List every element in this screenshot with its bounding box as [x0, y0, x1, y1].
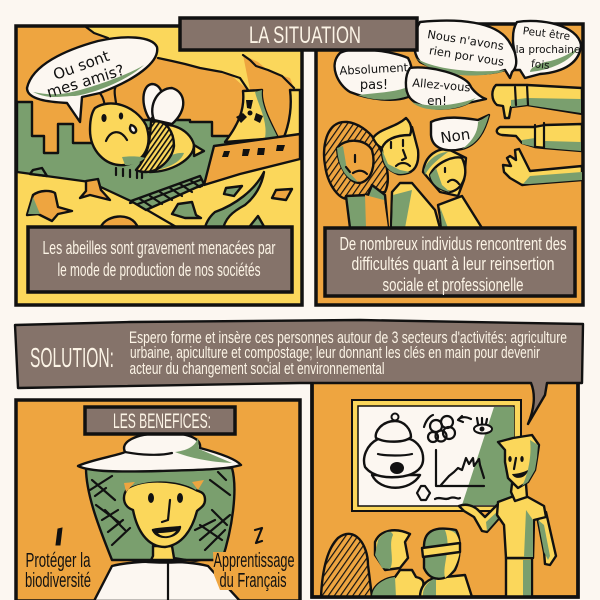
heading: les benefices: LES BENEFICES: — [113, 410, 211, 433]
icon: small bee — [474, 418, 492, 434]
speech bubble: absolument pas: Absolument — [339, 60, 409, 78]
speech bubble: non — [431, 115, 489, 150]
arrow: bee to flower — [458, 416, 471, 422]
title banner — [180, 18, 417, 50]
speech bubble: peut etre — [513, 21, 581, 78]
icon: beehive — [364, 414, 423, 488]
speech bubble: nous n'avons: rien por vous — [428, 43, 505, 69]
icon: hexagon — [417, 486, 430, 500]
panel: people rejected — [316, 21, 583, 305]
speech bubble: ou sont mes amis — [27, 37, 157, 122]
icon: flower — [424, 415, 455, 442]
bee — [90, 83, 204, 178]
speech bubble: allez-vous en: Allez-vous — [412, 75, 471, 95]
benefit 1: Protéger la — [26, 550, 91, 572]
left arm — [459, 505, 502, 532]
right arm — [537, 512, 556, 565]
solution banner — [15, 320, 583, 424]
benefit 1: biodiversité — [25, 570, 91, 592]
sky smoke — [17, 27, 250, 170]
neck and head — [511, 484, 527, 501]
whiteboard — [352, 400, 521, 511]
panel: benefits — [16, 400, 300, 600]
speech bubble: nous n'avons: Nous n'avons — [426, 27, 505, 53]
speech bubble: ou sont mes amis: mes amis? — [45, 61, 127, 102]
panel: presentation — [312, 380, 578, 597]
speech bubble: peut etre: fois — [530, 58, 550, 72]
line chart — [436, 450, 484, 486]
veil net — [86, 468, 234, 560]
speech bubble: nous n'avons — [414, 21, 517, 78]
benefit 2: du Français — [220, 570, 286, 592]
nuclear plant — [204, 90, 300, 185]
solution banner: acteur du changement social et environnemental — [130, 359, 384, 378]
benefit 2: Apprentissage — [214, 550, 294, 572]
title banner: LA SITUATION — [249, 22, 361, 49]
coat — [94, 562, 240, 600]
heading: les benefices — [85, 407, 235, 434]
presenter — [459, 435, 556, 597]
shirt — [497, 496, 546, 558]
caption: le mode de production de nos sociétés — [58, 259, 260, 280]
speech bubble: non: Non — [439, 125, 471, 147]
person: woman with headband — [423, 149, 482, 228]
person: man — [373, 118, 440, 228]
pants — [506, 558, 532, 597]
panel: bees threatened — [16, 26, 302, 305]
beekeeper — [78, 433, 241, 600]
hills — [17, 150, 300, 304]
benefit 2 — [213, 528, 296, 592]
hat — [78, 433, 241, 471]
audience — [321, 529, 472, 597]
speech bubble: absolument pas — [335, 49, 412, 100]
speech bubble: allez-vous en: en! — [427, 94, 447, 108]
caption — [28, 227, 292, 292]
speech bubble: absolument pas: pas! — [360, 78, 388, 93]
tree stumps — [27, 168, 292, 232]
speech bubble: ou sont mes amis: Ou sont — [51, 47, 112, 84]
river — [204, 172, 264, 232]
caption — [325, 228, 575, 296]
person: woman with curly hair — [324, 122, 388, 228]
benefit 1 — [25, 528, 91, 592]
caption: sociale et professionelle — [382, 275, 524, 295]
head — [151, 546, 186, 560]
hand: thumbs down — [492, 85, 582, 118]
city silhouette — [17, 102, 232, 215]
speech bubble: allez-vous en — [406, 67, 486, 110]
hand: stop — [503, 149, 582, 185]
speech bubble: peut etre: Peut être — [522, 25, 571, 43]
hand: pointing — [497, 123, 582, 151]
solution banner: SOLUTION: — [30, 342, 114, 373]
caption: Les abeilles sont gravement menacées par — [42, 237, 276, 258]
speech bubble: peut etre: la prochaine — [516, 44, 580, 56]
